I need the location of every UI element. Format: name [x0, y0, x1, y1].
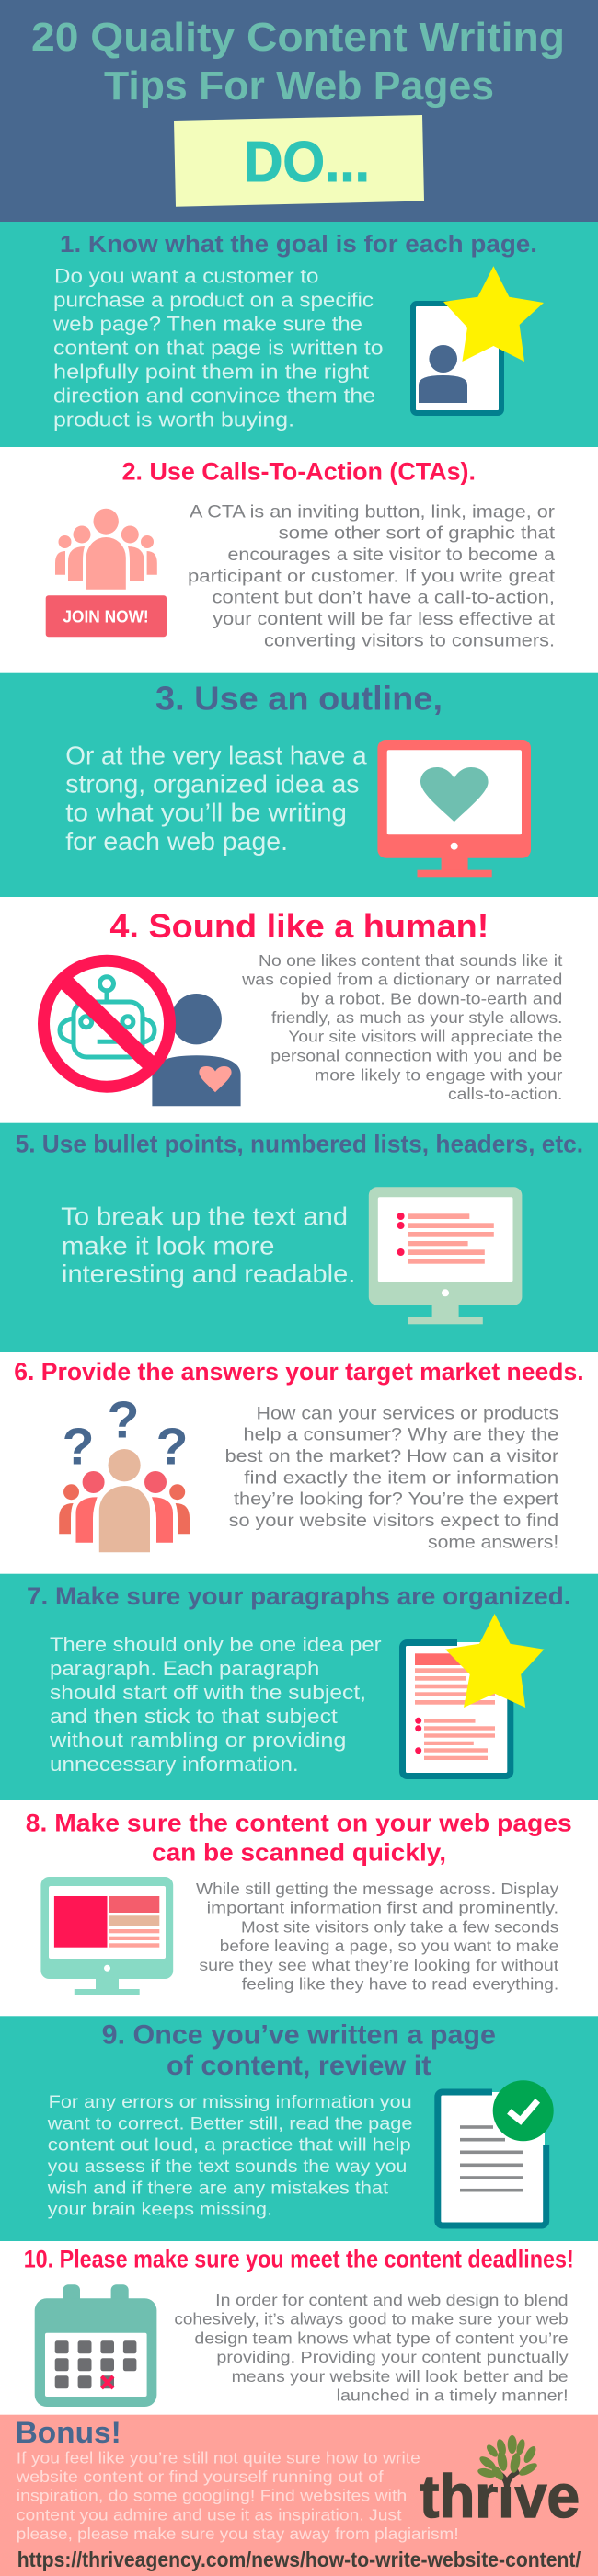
text block: tip 6: they’re looking for? You’re the expert	[234, 1489, 559, 1510]
button: join now: JOIN NOW!	[63, 608, 149, 627]
text block: tip 1: purchase a product on a specific	[53, 288, 374, 311]
panel: tip 5	[0, 1123, 598, 1352]
text block: bonus: content you admire and use it as inspiration. Just	[17, 2505, 402, 2524]
text block: tip 4: by a robot. Be down-to-earth and	[301, 989, 562, 1007]
text block: tip 3: Or at the very least have a	[65, 742, 367, 770]
text block: tip 3: strong, organized idea as	[65, 770, 360, 799]
text block: tip 1: product is worth buying.	[53, 408, 294, 431]
icon: people with question marks: ?	[156, 1418, 188, 1477]
text block: tip 4: calls-to-action.	[448, 1085, 562, 1103]
text block: tip 9: want to correct. Better still, read the page	[47, 2113, 413, 2133]
text block: tip 2: converting visitors to consumers.	[264, 630, 555, 650]
text block: tip 8	[196, 1880, 558, 1994]
text block: tip 6: best on the market? How can a visitor	[225, 1446, 559, 1466]
text block: tip 10: cohesively, it’s always good to make sure your web	[174, 2310, 569, 2329]
panel: tip 8	[0, 1800, 598, 2016]
heading: tip 9	[102, 2020, 496, 2081]
panel: bonus	[0, 2415, 598, 2576]
text block: tip 4: friendly, as much as your style allows.	[271, 1008, 562, 1027]
sticky note: DO: DO...	[244, 131, 370, 194]
icon: monitor with page layout	[40, 1877, 173, 1995]
heading: tip 7: 7. Make sure your paragraphs are organized.	[27, 1582, 570, 1610]
text block: tip 4: personal connection with you and be	[270, 1047, 562, 1065]
text block: tip 1: web page? Then make sure the	[52, 312, 362, 335]
heading: tip 5: 5. Use bullet points, numbered lists, headers, etc.	[16, 1131, 583, 1158]
text block: tip 4: Your site visitors will appreciate the	[288, 1028, 562, 1046]
text block: tip 5: To break up the text and	[61, 1202, 348, 1231]
heading: tip 9: 9. Once you’ve written a page	[102, 2020, 496, 2051]
text block: tip 8: feeling like they have to read everything.	[242, 1975, 558, 1994]
text block: tip 6: How can your services or products	[256, 1403, 558, 1423]
text block: tip 1: helpfully point them in the right	[53, 360, 369, 383]
panel: tip 10	[0, 2241, 598, 2415]
heading: tip 2: 2. Use Calls-To-Action (CTAs).	[122, 458, 476, 486]
heading: tip 8	[26, 1810, 572, 1866]
text block: tip 8: important information first and prominently.	[207, 1899, 558, 1917]
panel: tip 3	[0, 673, 598, 897]
text block: tip 6: so your website visitors expect to find	[229, 1511, 558, 1531]
text block: tip 9	[47, 2092, 413, 2220]
text block: tip 9: you assess if the text sounds the way you	[48, 2156, 407, 2177]
heading: tip 1: 1. Know what the goal is for each page.	[60, 232, 537, 258]
text block: tip 6: find exactly the item or information	[244, 1467, 558, 1488]
text block: tip 8: sure they see what they’re looking for without	[199, 1956, 558, 1974]
icon: crowd of people	[55, 509, 157, 590]
text block: tip 8: Most site visitors only take a few seconds	[241, 1917, 558, 1936]
text block: tip 7	[49, 1633, 381, 1776]
text block: tip 6: some answers!	[428, 1532, 558, 1552]
text block: tip 5: interesting and readable.	[62, 1259, 355, 1288]
text block: tip 10	[174, 2291, 569, 2405]
text block: tip 1	[52, 264, 384, 431]
text block: bonus: website content or find yourself running out of	[16, 2467, 384, 2486]
icon: monitor with bullet list	[369, 1187, 522, 1324]
logo: thrive: thrive	[420, 2462, 580, 2530]
text block: tip 10: providing. Providing your content punctually	[216, 2348, 569, 2366]
heading: tip 4: 4. Sound like a human!	[109, 907, 489, 945]
text block: tip 8: before leaving a page, so you want to make	[220, 1937, 558, 1955]
text block: tip 5: make it look more	[62, 1231, 274, 1259]
icon: people with question marks: ?	[108, 1391, 139, 1450]
text block: tip 7: There should only be one idea per	[50, 1633, 381, 1656]
text block: tip 4: was copied from a dictionary or narrated	[241, 971, 562, 989]
heading: tip 8: can be scanned quickly,	[152, 1838, 446, 1866]
panel: tip 1	[0, 222, 598, 447]
text block: tip 3	[65, 742, 367, 856]
heading: tip 9: of content, review it	[167, 2051, 431, 2081]
icon: robot prohibited	[44, 960, 169, 1087]
panel: tip 2	[0, 447, 598, 673]
text block: bonus: please, please make sure you stay away from plagiarism!	[17, 2524, 459, 2543]
text block: bonus: If you feel like you’re still not quite sure how to write	[17, 2448, 420, 2467]
panel: tip 7	[0, 1574, 598, 1800]
icon: reviewed document with check mark	[438, 2080, 554, 2225]
text block: tip 5	[61, 1202, 355, 1288]
text block: tip 2: A CTA is an inviting button, link, image, or	[190, 501, 556, 522]
text block: tip 1: content on that page is written to	[53, 336, 384, 359]
text block: tip 10: design team knows what type of content you’re	[194, 2329, 569, 2347]
text block: tip 1: Do you want a customer to	[54, 264, 318, 287]
title: 20 Quality Content Writing	[31, 15, 565, 60]
heading: tip 3: 3. Use an outline,	[155, 680, 443, 718]
text block: tip 2	[188, 501, 556, 650]
text block: tip 9: your brain keeps missing.	[48, 2200, 272, 2220]
text block: tip 4: more likely to engage with your	[315, 1065, 563, 1084]
text block: tip 7: without rambling or providing	[49, 1729, 346, 1752]
title: Tips For Web Pages	[104, 63, 494, 109]
heading: tip 6: 6. Provide the answers your target market needs.	[14, 1358, 584, 1386]
icon: document with star	[403, 1614, 545, 1776]
text block: tip 3: to what you’ll be writing	[65, 799, 347, 827]
heading: tip 8: 8. Make sure the content on your web pages	[26, 1810, 572, 1837]
text block: tip 7: should start off with the subject,	[50, 1681, 366, 1704]
text block: tip 7: paragraph. Each paragraph	[50, 1657, 319, 1680]
text block: tip 4	[241, 951, 563, 1103]
text block: tip 9: wish and if there are any mistakes that	[47, 2178, 389, 2198]
panel: tip 6	[0, 1352, 598, 1574]
text block: tip 9: For any errors or missing information you	[49, 2092, 412, 2112]
text block: tip 4: No one likes content that sounds like it	[259, 951, 563, 970]
text block: bonus: inspiration, do some googling! Find websites with	[17, 2487, 407, 2505]
text block: bonus	[16, 2448, 459, 2543]
panel: tip 9	[0, 2016, 598, 2241]
icon: person with heart	[152, 994, 241, 1106]
button: join now	[46, 595, 167, 637]
text block: tip 3: for each web page.	[65, 827, 288, 856]
icon: profile card with star	[413, 266, 544, 413]
title	[31, 15, 565, 109]
text block: tip 2: participant or customer. If you write great	[188, 566, 556, 586]
text block: tip 2: content but don’t have a call-to-action,	[212, 588, 555, 608]
text block: tip 1: direction and convince them the	[53, 384, 375, 407]
text block: tip 10: means your website will look better and be	[232, 2367, 569, 2386]
text block: tip 2: some other sort of graphic that	[279, 523, 556, 544]
text block: tip 9: content out loud, a practice that will help	[48, 2135, 411, 2156]
sticky note: DO	[174, 115, 424, 207]
text block: tip 8: While still getting the message across. Display	[196, 1880, 558, 1898]
text block: tip 10: launched in a timely manner!	[337, 2386, 569, 2405]
text block: tip 2: encourages a site visitor to become a	[228, 545, 555, 565]
panel: tip 4	[0, 897, 598, 1123]
heading: bonus: Bonus!	[16, 2416, 121, 2449]
text block: tip 6: help a consumer? Why are they the	[243, 1425, 558, 1445]
text block: tip 7: and then stick to that subject	[50, 1705, 338, 1728]
icon: monitor with heart	[377, 740, 531, 877]
panel: header	[0, 0, 598, 222]
text block: tip 6	[225, 1403, 559, 1552]
text block: tip 10: In order for content and web design to blend	[215, 2291, 569, 2309]
icon: people with question marks: ?	[63, 1418, 94, 1477]
text block: tip 7: unnecessary information.	[50, 1753, 299, 1776]
icon: people with question marks	[59, 1391, 190, 1552]
icon: calendar	[35, 2284, 156, 2407]
text block: tip 2: your content will be far less effective at	[213, 609, 556, 629]
